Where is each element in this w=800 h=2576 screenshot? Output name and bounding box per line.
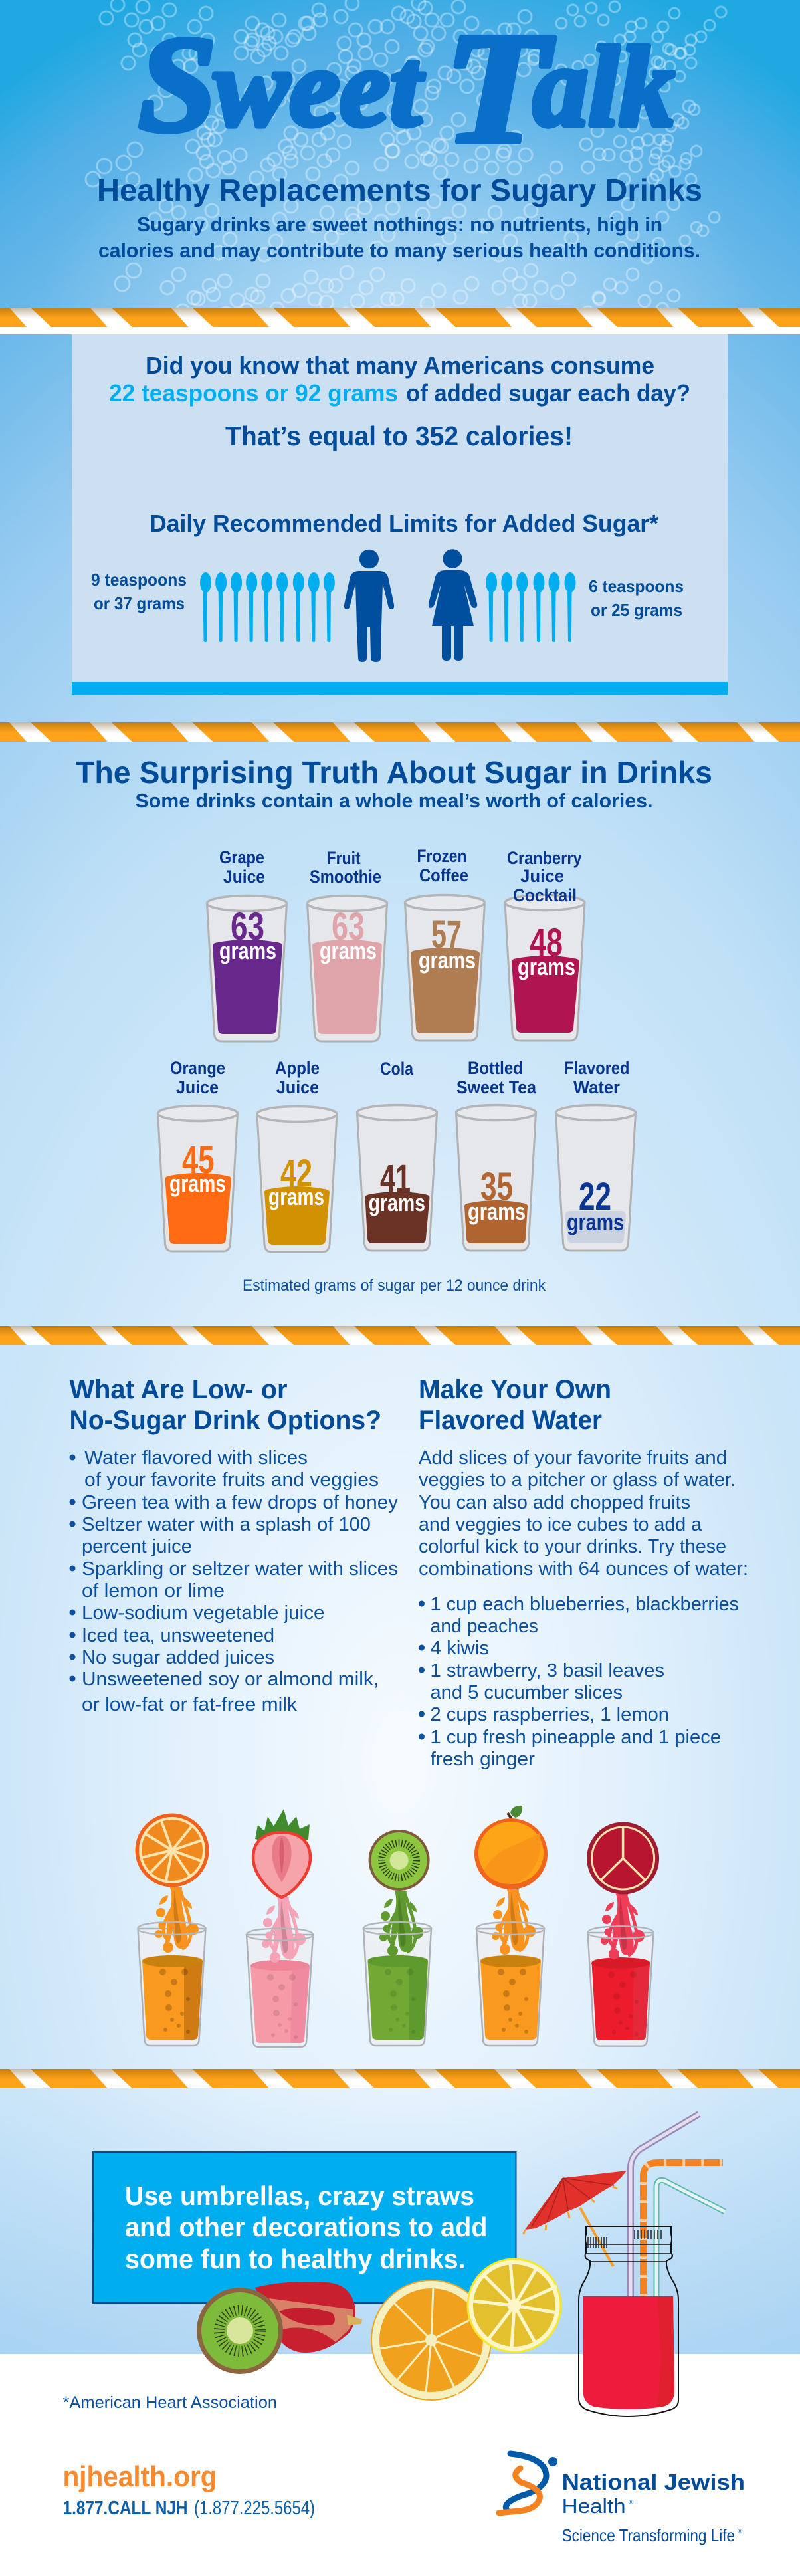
drink: apple juice: Apple	[275, 1058, 320, 1078]
list: water combinations: fresh ginger	[431, 1749, 535, 1770]
list: low or no sugar options: Low-sodium vegetable juice	[82, 1602, 324, 1624]
phone number: 1.877.CALL NJH	[62, 2498, 187, 2519]
drink: cranberry juice cocktail: Cranberry	[507, 848, 582, 868]
men limit label	[91, 570, 187, 613]
drink: cranberry juice cocktail: grams	[518, 953, 575, 980]
header bubbles	[86, 0, 726, 322]
illustration: pomegranate juice glass	[587, 1822, 659, 2046]
illustration: purple straw	[631, 2114, 699, 2296]
panel: added sugar facts	[72, 334, 728, 695]
phone number: (1.877.225.5654)	[194, 2498, 315, 2519]
title: alk	[533, 24, 674, 150]
list: water combinations: 2 cups raspberries, 1 lemon	[431, 1704, 669, 1725]
striped divider 4	[0, 2069, 800, 2088]
paragraph: flavored water: veggies to a pitcher or glass of water.	[419, 1469, 736, 1491]
drink: cranberry juice cocktail: Cocktail	[513, 885, 577, 905]
drink: bottled sweet tea: 35	[480, 1165, 513, 1208]
drink: grape juice: 63	[231, 905, 264, 948]
women limit label: 6 teaspoons	[589, 576, 684, 596]
paragraph: flavored water: You can also add chopped fruits	[419, 1492, 690, 1513]
list: water combinations: 1 strawberry, 3 basil leaves	[431, 1660, 664, 1681]
illustration: orange slice juice glass	[136, 1813, 209, 2046]
callout: decorate drinks: and other decorations to add	[125, 2212, 488, 2242]
drink: fruit smoothie	[307, 848, 387, 1041]
logo: National Jewish Health	[499, 2454, 745, 2545]
callout: decorate drinks: Use umbrellas, crazy straws	[125, 2181, 474, 2211]
drink: fruit smoothie: Fruit	[327, 848, 361, 868]
heading: make your own flavored water: Make Your Own	[419, 1375, 611, 1404]
limits heading: Daily Recommended Limits for Added Sugar*	[150, 510, 658, 537]
heading: low or no sugar options: What Are Low- or	[69, 1375, 287, 1404]
list: low or no sugar options: percent juice	[82, 1536, 192, 1557]
icon: man	[344, 550, 394, 662]
title: weet	[214, 27, 425, 150]
drink: cola: 41	[380, 1157, 411, 1200]
striped divider 2	[0, 722, 800, 742]
fact question: 22 teaspoons or 92 grams	[109, 379, 398, 407]
drink: bottled sweet tea	[456, 1058, 537, 1251]
callout: decorate drinks: some fun to healthy drinks.	[125, 2244, 465, 2274]
logo: National Jewish Health: ®	[738, 2528, 743, 2535]
men limit label: 9 teaspoons	[91, 570, 187, 590]
section subheading: Some drinks contain a whole meal’s worth of calories.	[136, 789, 652, 812]
list: water combinations: 4 kiwis	[431, 1638, 489, 1659]
drink: flavored water: Flavored	[564, 1058, 630, 1078]
icon: nine spoons	[200, 572, 335, 642]
drink: frozen coffee: Coffee	[419, 865, 468, 885]
title: S	[138, 8, 217, 160]
drink: orange juice: 45	[182, 1138, 214, 1182]
illustration: strawberry juice glass	[247, 1809, 313, 2047]
drink: grape juice: Juice	[223, 867, 265, 887]
heading: low or no sugar options: No-Sugar Drink Options?	[69, 1406, 381, 1435]
heading: make your own flavored water: Flavored Water	[419, 1406, 602, 1435]
drink: fruit smoothie: Smoothie	[310, 867, 381, 887]
illustration: juice jar	[579, 2226, 678, 2416]
illustration: whole orange juice glass	[474, 1806, 548, 2046]
drink: bottled sweet tea: Sweet Tea	[456, 1077, 537, 1097]
intro text: calories and may contribute to many serious health conditions.	[98, 239, 700, 262]
footnote: *American Heart Association	[62, 2393, 277, 2412]
footer white area	[0, 2354, 800, 2576]
drink: frozen coffee: grams	[419, 946, 476, 974]
illustration: orange slice	[371, 2280, 491, 2400]
drink: grape juice: grams	[219, 937, 276, 964]
drink: cola: grams	[369, 1189, 425, 1216]
drink: cola: Cola	[380, 1059, 414, 1079]
logo: National Jewish Health: ®	[629, 2499, 634, 2506]
illustration: strawberry half	[255, 2282, 362, 2353]
fact question	[109, 352, 690, 407]
list: low or no sugar options: No sugar added juices	[82, 1647, 274, 1668]
striped divider 3	[0, 1326, 800, 1345]
subtitle: Healthy Replacements for Sugary Drinks	[97, 173, 702, 207]
phone number	[62, 2498, 315, 2519]
illustration: cocktail umbrella	[524, 2171, 627, 2266]
list: low or no sugar options: Green tea with a few drops of honey	[82, 1492, 399, 1513]
drink: orange juice	[158, 1058, 238, 1251]
list: low or no sugar options: of your favorite fruits and veggies	[84, 1469, 379, 1491]
drink: cranberry juice cocktail	[505, 848, 585, 1041]
list: low or no sugar options: Water flavored with slices	[84, 1448, 308, 1469]
drink: fruit smoothie: grams	[320, 937, 377, 964]
drink: flavored water	[555, 1058, 635, 1251]
women limit label	[589, 576, 684, 620]
heading: low or no sugar options	[69, 1375, 381, 1435]
heading: make your own flavored water	[419, 1375, 611, 1435]
drink: apple juice: 42	[280, 1152, 312, 1195]
illustration: orange striped straw	[643, 2163, 723, 2296]
chart caption: Estimated grams of sugar per 12 ounce drink	[243, 1277, 546, 1295]
striped divider 1	[0, 308, 800, 327]
drink: orange juice: Orange	[170, 1058, 225, 1078]
logo: National Jewish Health: National Jewish	[562, 2470, 745, 2494]
paragraph: flavored water: and veggies to ice cubes to add a	[419, 1514, 702, 1535]
list: low or no sugar options: or low-fat or fat-free milk	[82, 1694, 298, 1715]
list: water combinations: 1 cup each blueberries, blackberries	[431, 1594, 739, 1615]
men limit label: or 37 grams	[94, 593, 185, 613]
drink: fruit smoothie: 63	[332, 905, 365, 948]
illustration: lemon slice	[468, 2259, 561, 2352]
logo: National Jewish Health: Science Transforming Life	[562, 2525, 735, 2545]
list: low or no sugar options: Sparkling or seltzer water with slices	[82, 1558, 398, 1580]
drink: orange juice: Juice	[176, 1077, 219, 1097]
fact question: Did you know that many Americans consume	[146, 352, 654, 379]
drink: flavored water: 22	[579, 1175, 611, 1218]
drink: flavored water: grams	[567, 1208, 624, 1235]
paragraph: flavored water: combinations with 64 ounces of water:	[419, 1558, 748, 1580]
calories statement: That’s equal to 352 calories!	[225, 421, 573, 451]
paragraph: flavored water	[419, 1448, 748, 1580]
section heading: sugar in drinks: The Surprising Truth About Sugar in Drinks	[76, 755, 712, 790]
illustration: kiwi juice glass	[363, 1830, 431, 2046]
list: low or no sugar options: Unsweetened soy or almond milk,	[82, 1669, 379, 1690]
icon: woman	[429, 549, 477, 661]
panel base bar	[72, 682, 728, 695]
list: low or no sugar options: of lemon or lime	[82, 1580, 225, 1602]
illustration: teal straw	[656, 2180, 725, 2296]
drink: bottled sweet tea: Bottled	[468, 1058, 523, 1078]
drink: flavored water: Water	[573, 1077, 620, 1097]
drink: frozen coffee: Frozen	[417, 846, 466, 866]
drink: cola	[357, 1059, 437, 1251]
callout: decorate drinks	[93, 2152, 516, 2303]
list: water combinations: and peaches	[431, 1616, 538, 1637]
drink: frozen coffee	[405, 846, 485, 1041]
website: njhealth.org	[62, 2460, 217, 2493]
list: low or no sugar options: Iced tea, unsweetened	[82, 1625, 274, 1646]
drink: apple juice	[257, 1058, 337, 1252]
illustration: kiwi half	[197, 2288, 283, 2374]
drink: bottled sweet tea: grams	[468, 1198, 526, 1225]
intro text: Sugary drinks are sweet nothings: no nutrients, high in	[137, 213, 662, 236]
paragraph: flavored water: colorful kick to your drinks. Try these	[419, 1536, 726, 1557]
paragraph: flavored water: Add slices of your favorite fruits and	[419, 1448, 727, 1469]
drink: cranberry juice cocktail: Juice	[520, 866, 564, 886]
list: low or no sugar options: Seltzer water with a splash of 100	[82, 1514, 371, 1535]
drink: apple juice: grams	[268, 1183, 324, 1210]
title	[138, 0, 674, 176]
drink: cranberry juice cocktail: 48	[530, 921, 563, 964]
list: water combinations	[419, 1594, 739, 1770]
list: low or no sugar options	[69, 1448, 399, 1715]
logo: National Jewish Health: Health	[562, 2494, 626, 2518]
fact question: of added sugar each day?	[406, 379, 690, 407]
intro text	[98, 213, 700, 262]
women limit label: or 25 grams	[591, 600, 682, 620]
icon: six spoons	[486, 572, 575, 642]
drink: apple juice: Juice	[276, 1077, 319, 1097]
drink: orange juice: grams	[169, 1170, 226, 1197]
list: water combinations: and 5 cucumber slices	[431, 1682, 623, 1703]
list: water combinations: 1 cup fresh pineapple and 1 piece	[431, 1727, 721, 1748]
drink: grape juice: Grape	[219, 847, 264, 867]
drink: frozen coffee: 57	[431, 913, 462, 956]
title: T	[444, 0, 555, 176]
drink: grape juice	[207, 847, 287, 1041]
